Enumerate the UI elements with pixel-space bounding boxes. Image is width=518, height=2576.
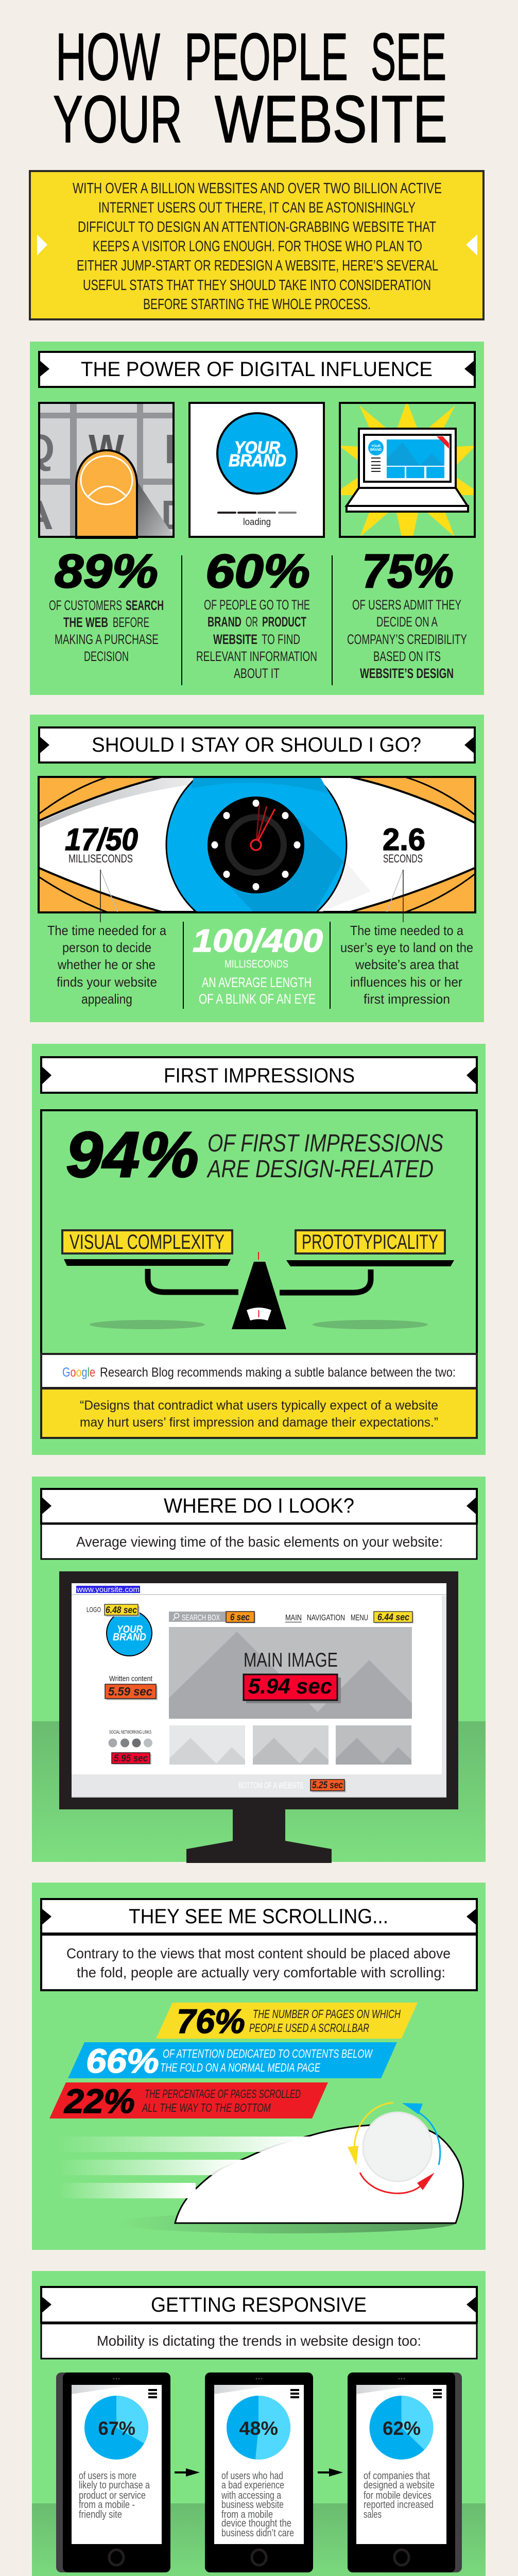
heading banner: SHOULD I STAY OR SHOULD I GO? bbox=[92, 734, 421, 756]
monitor bbox=[59, 1571, 458, 1863]
text: of first impressions are design-related: OF FIRST IMPRESSIONS bbox=[208, 1130, 443, 1157]
icon: balance scale bbox=[64, 1252, 454, 1329]
stat: 100/400 blink: OF A BLINK OF AN EYE bbox=[199, 991, 316, 1007]
phone: 62% bbox=[348, 2372, 462, 2572]
heading banner bbox=[40, 1489, 478, 1523]
phone: 67%: from a mobile - bbox=[79, 2499, 135, 2511]
phone: 67%: 67% bbox=[98, 2418, 135, 2439]
intro text: KEEPS A VISITOR LONG ENOUGH. FOR THOSE WHO PLAN TO bbox=[93, 238, 422, 255]
stat band: 66%: THE FOLD ON A NORMAL MEDIA PAGE bbox=[160, 2061, 320, 2074]
heading banner: WHERE DO I LOOK? bbox=[164, 1495, 354, 1517]
mouse body bbox=[175, 2124, 463, 2223]
phone: 62%: reported increased bbox=[364, 2499, 434, 2511]
navigation menu: 6.44 sec bbox=[377, 1612, 409, 1622]
title bbox=[53, 19, 447, 157]
google research strip bbox=[41, 1354, 477, 1388]
subheading box bbox=[41, 2324, 477, 2359]
motion lines bbox=[59, 2137, 312, 2198]
quote strip: may hurt users’ first impression and damage their expectations.” bbox=[80, 1415, 438, 1430]
stat: 94%: 94% bbox=[66, 1119, 199, 1191]
intro text: INTERNET USERS OUT THERE, IT CAN BE ASTONISHINGLY bbox=[98, 200, 416, 216]
navigation menu: NAVIGATION bbox=[307, 1614, 345, 1622]
scale box frame bbox=[41, 1110, 477, 1354]
stat: 60%: PRODUCT bbox=[262, 614, 306, 630]
stat: 60%: OR bbox=[246, 614, 258, 630]
subheading box bbox=[41, 1524, 477, 1559]
heading banner bbox=[38, 352, 476, 387]
arrow bbox=[318, 2468, 343, 2477]
icon: laptop with starburst: YOUR bbox=[371, 445, 381, 448]
stat band: 22%: 22% bbox=[63, 2082, 135, 2120]
mouse shadow bbox=[116, 2213, 456, 2233]
icon: your brand loading: BRAND bbox=[229, 451, 286, 470]
icon: finger on keyboard bbox=[38, 402, 175, 539]
stat band: 66%: OF ATTENTION DEDICATED TO CONTENTS BELOW bbox=[163, 2047, 373, 2060]
stat: 2.6 seconds: SECONDS bbox=[383, 852, 423, 865]
stat: 89%: DECISION bbox=[84, 649, 129, 664]
text: of first impressions are design-related: ARE DESIGN-RELATED bbox=[206, 1156, 434, 1183]
stat: 17/50 milliseconds: 17/50 bbox=[65, 822, 138, 857]
stat: 60%: RELEVANT INFORMATION bbox=[196, 649, 317, 664]
title: PEOPLE bbox=[184, 19, 348, 94]
written content bbox=[105, 1674, 158, 1700]
phone: 48%: a bad experience bbox=[221, 2480, 284, 2491]
panel: getting responsive bbox=[32, 2271, 486, 2576]
stat: 75% bbox=[347, 545, 467, 681]
stat: 60%: BRAND bbox=[208, 614, 241, 630]
search box: 6 sec bbox=[230, 1612, 250, 1622]
phone: 67%: likely to purchase a bbox=[79, 2480, 150, 2491]
text: right caption: influences his or her bbox=[350, 974, 462, 990]
stat: 100/400 blink: 100/400 bbox=[193, 923, 323, 959]
divider bbox=[183, 922, 184, 1009]
icon: your brand loading: loading bbox=[243, 517, 271, 527]
text: of first impressions are design-related bbox=[206, 1130, 443, 1183]
bottom of a website bar: BOTTOM OF A WEBSITE bbox=[238, 1781, 304, 1790]
icon: laptop with starburst bbox=[339, 401, 476, 537]
social networking links: SOCIAL NETWORKING LINKS bbox=[109, 1730, 151, 1735]
phone: 62%: for mobile devices bbox=[364, 2490, 431, 2501]
icon: laptop with starburst: BRAND bbox=[370, 448, 382, 452]
stat: 60%: OF PEOPLE GO TO THE bbox=[204, 597, 310, 613]
stat: 75%: COMPANY’S CREDIBILITY bbox=[347, 632, 467, 647]
icon: finger on keyboard: A bbox=[22, 492, 54, 538]
intro text: BEFORE STARTING THE WHOLE PROCESS. bbox=[143, 296, 371, 313]
social networking links bbox=[108, 1730, 152, 1765]
arrow: yellow bbox=[348, 2103, 393, 2165]
stat: 89%: 89% bbox=[55, 545, 158, 598]
stat: 17/50 milliseconds: MILLISECONDS bbox=[68, 852, 133, 865]
darker lower band bbox=[32, 2503, 486, 2576]
stat band: 76%: 76% bbox=[177, 2002, 245, 2040]
subheading box: Average viewing time of the basic elements on your website: bbox=[76, 1534, 443, 1550]
stat: 100/400 blink bbox=[193, 923, 323, 1007]
title: HOW bbox=[56, 19, 160, 94]
stat band: 66% bbox=[68, 2042, 397, 2080]
search box bbox=[169, 1612, 255, 1623]
icon: left white triangle bbox=[37, 234, 47, 256]
text: right caption bbox=[340, 923, 473, 1007]
text: left caption: appealing bbox=[81, 991, 132, 1007]
stat: 75%: BASED ON ITS bbox=[373, 649, 441, 664]
divider bbox=[332, 555, 333, 685]
scrollbar bbox=[442, 1596, 446, 1774]
stat: 89%: THE WEB bbox=[63, 615, 108, 630]
address bar: www.yoursite.com bbox=[76, 1585, 140, 1594]
heading banner: GETTING RESPONSIVE bbox=[151, 2294, 367, 2316]
main image bbox=[169, 1627, 412, 1719]
wheel disc bbox=[363, 2112, 432, 2181]
stat: 75%: DECIDE ON A bbox=[376, 614, 438, 630]
subheading box bbox=[41, 1935, 477, 1990]
written content: 5.59 sec bbox=[108, 1685, 152, 1698]
heading banner bbox=[40, 2287, 478, 2323]
stat: 2.6 seconds: 2.6 bbox=[383, 822, 425, 857]
phone: 48% bbox=[205, 2372, 313, 2572]
darker lower band bbox=[32, 1721, 486, 1862]
monitor stand bbox=[186, 1809, 332, 1863]
title: WEBSITE bbox=[215, 81, 447, 157]
label: visual complexity: VISUAL COMPLEXITY bbox=[70, 1231, 225, 1253]
phone: 62%: 62% bbox=[383, 2418, 421, 2439]
panel: they see me scrolling bbox=[32, 1883, 486, 2250]
title: YOUR bbox=[53, 81, 182, 157]
icon: your brand loading bbox=[189, 403, 324, 537]
label: prototypicality: PROTOTYPICALITY bbox=[302, 1231, 438, 1253]
stat: 75%: WEBSITE’S DESIGN bbox=[360, 666, 454, 681]
text: right caption: The time needed to a bbox=[350, 923, 463, 938]
heading banner bbox=[40, 1057, 478, 1093]
phone: 67% bbox=[56, 2372, 170, 2572]
text: left caption: person to decide bbox=[62, 940, 151, 955]
stat: 60%: TO FIND bbox=[262, 632, 300, 647]
stat: 100/400 blink: AN AVERAGE LENGTH bbox=[202, 975, 312, 990]
phone: 48%: business website bbox=[221, 2499, 284, 2511]
phone: 48%: with accessing a bbox=[221, 2490, 282, 2501]
logo block: LOGO bbox=[87, 1605, 101, 1614]
text: left caption: The time needed for a bbox=[47, 923, 166, 938]
quote strip bbox=[41, 1388, 477, 1438]
quote strip: “Designs that contradict what users typically expect of a website bbox=[80, 1398, 438, 1413]
navigation menu: MENU bbox=[351, 1614, 368, 1622]
stat: 100/400 blink: MILLISECONDS bbox=[225, 958, 288, 970]
google research strip: Research Blog recommends making a subtle balance between the two: bbox=[100, 1365, 456, 1380]
panel: the power of digital influence bbox=[22, 342, 484, 695]
text: right caption: user’s eye to land on the bbox=[340, 940, 473, 955]
bottom of a website bar bbox=[72, 1774, 446, 1798]
text: right caption: first impression bbox=[364, 991, 450, 1007]
subheading box: Mobility is dictating the trends in website design too: bbox=[97, 2333, 421, 2349]
heading banner: THE POWER OF DIGITAL INFLUENCE bbox=[81, 358, 433, 381]
text: left caption: finds your website bbox=[57, 974, 157, 990]
icon: finger on keyboard: Q bbox=[25, 426, 55, 472]
icon: eye with clock pupil bbox=[38, 776, 476, 913]
stat band: 22%: ALL THE WAY TO THE BOTTOM bbox=[142, 2101, 271, 2114]
main image: 5.94 sec bbox=[248, 1674, 332, 1698]
phone: 48%: from a mobile bbox=[221, 2509, 273, 2520]
stat band: 76%: THE NUMBER OF PAGES ON WHICH bbox=[253, 2007, 401, 2021]
main image: MAIN IMAGE bbox=[244, 1649, 338, 1671]
subheading box: the fold, people are actually very comfortable with scrolling: bbox=[77, 1964, 445, 1980]
phone: 67%: friendly site bbox=[79, 2509, 122, 2520]
stat band: 76% bbox=[156, 2002, 418, 2040]
intro text bbox=[73, 180, 442, 313]
logo block: YOUR bbox=[117, 1624, 143, 1635]
navigation menu bbox=[285, 1612, 413, 1623]
arrow: blue bbox=[402, 2103, 440, 2165]
stat: 89%: BEFORE bbox=[113, 615, 149, 630]
title: SEE bbox=[371, 19, 446, 94]
stat band: 22%: THE PERCENTAGE OF PAGES SCROLLED bbox=[145, 2087, 301, 2100]
text: right caption: website’s area that bbox=[355, 957, 459, 972]
mouse wheel bbox=[372, 2113, 427, 2133]
panel: first impressions bbox=[32, 1044, 486, 1455]
text: left caption bbox=[47, 923, 166, 1007]
stat: 60%: WEBSITE bbox=[213, 632, 257, 647]
panel: where do I look bbox=[32, 1477, 486, 1863]
phone: 48%: 48% bbox=[239, 2418, 278, 2439]
phone: 62%: designed a website bbox=[364, 2480, 435, 2491]
phone: 62%: of companies that bbox=[364, 2470, 430, 2482]
phone: 67%: of users is more bbox=[79, 2470, 136, 2482]
stat: 60%: ABOUT IT bbox=[234, 666, 280, 681]
google research strip: Google bbox=[62, 1365, 95, 1380]
monitor bezel bbox=[59, 1571, 458, 1809]
stat band: 22% bbox=[49, 2082, 328, 2120]
heading banner: THEY SEE ME SCROLLING... bbox=[129, 1905, 388, 1928]
address bar bbox=[72, 1585, 446, 1595]
phone: 48%: of users who had bbox=[221, 2470, 283, 2482]
panel: should I stay or should I go bbox=[30, 715, 484, 1022]
bottom of a website bar: 5.25 sec bbox=[312, 1780, 343, 1791]
logo block: 6.48 sec bbox=[106, 1605, 137, 1615]
stat: 89%: SEARCH bbox=[126, 598, 164, 613]
stat: 75%: 75% bbox=[362, 545, 454, 598]
icon: finger on keyboard: W bbox=[89, 426, 124, 472]
icon: finger on keyboard: D bbox=[161, 492, 188, 538]
divider bbox=[181, 555, 182, 685]
logo block: BRAND bbox=[113, 1632, 146, 1643]
phone: 62%: sales bbox=[364, 2509, 382, 2520]
logo block bbox=[87, 1604, 152, 1656]
stat: 60% bbox=[196, 545, 317, 681]
stat band: 66%: 66% bbox=[86, 2042, 159, 2080]
thumbnail images bbox=[169, 1725, 411, 1765]
stat: 89%: MAKING A PURCHASE bbox=[55, 632, 159, 647]
stat: 89% bbox=[49, 545, 164, 664]
written content: Written content bbox=[109, 1674, 153, 1683]
stat: 75%: OF USERS ADMIT THEY bbox=[352, 597, 461, 613]
icon: finger on keyboard: E bbox=[164, 426, 191, 472]
icon: your brand loading: YOUR bbox=[234, 438, 280, 457]
arrow: red bbox=[360, 2173, 435, 2193]
navigation menu: MAIN bbox=[285, 1614, 302, 1622]
phone: 48%: device thought the bbox=[221, 2518, 291, 2529]
divider bbox=[330, 922, 331, 1009]
search box: SEARCH BOX bbox=[182, 1614, 220, 1622]
stat: 60%: 60% bbox=[205, 545, 310, 598]
phone: 67%: product or service bbox=[79, 2490, 146, 2501]
social networking links: 5.95 sec bbox=[114, 1753, 148, 1764]
text: left caption: whether he or she bbox=[57, 957, 156, 972]
arrow bbox=[175, 2468, 200, 2477]
stat: 89%: OF CUSTOMERS bbox=[49, 598, 122, 613]
icon: right white triangle bbox=[466, 234, 477, 256]
browser screen bbox=[72, 1583, 446, 1798]
heading banner: FIRST IMPRESSIONS bbox=[164, 1064, 355, 1087]
heading banner bbox=[40, 1899, 478, 1934]
heading banner bbox=[38, 727, 476, 762]
subheading box: Contrary to the views that most content should be placed above bbox=[66, 1945, 451, 1961]
phone: 48%: business didn’t care bbox=[221, 2528, 294, 2539]
icon: speeding mouse bbox=[59, 2103, 463, 2233]
stat band: 76%: PEOPLE USED A SCROLLBAR bbox=[249, 2021, 369, 2035]
leader lines bbox=[100, 870, 403, 922]
intro callout bbox=[30, 171, 484, 319]
